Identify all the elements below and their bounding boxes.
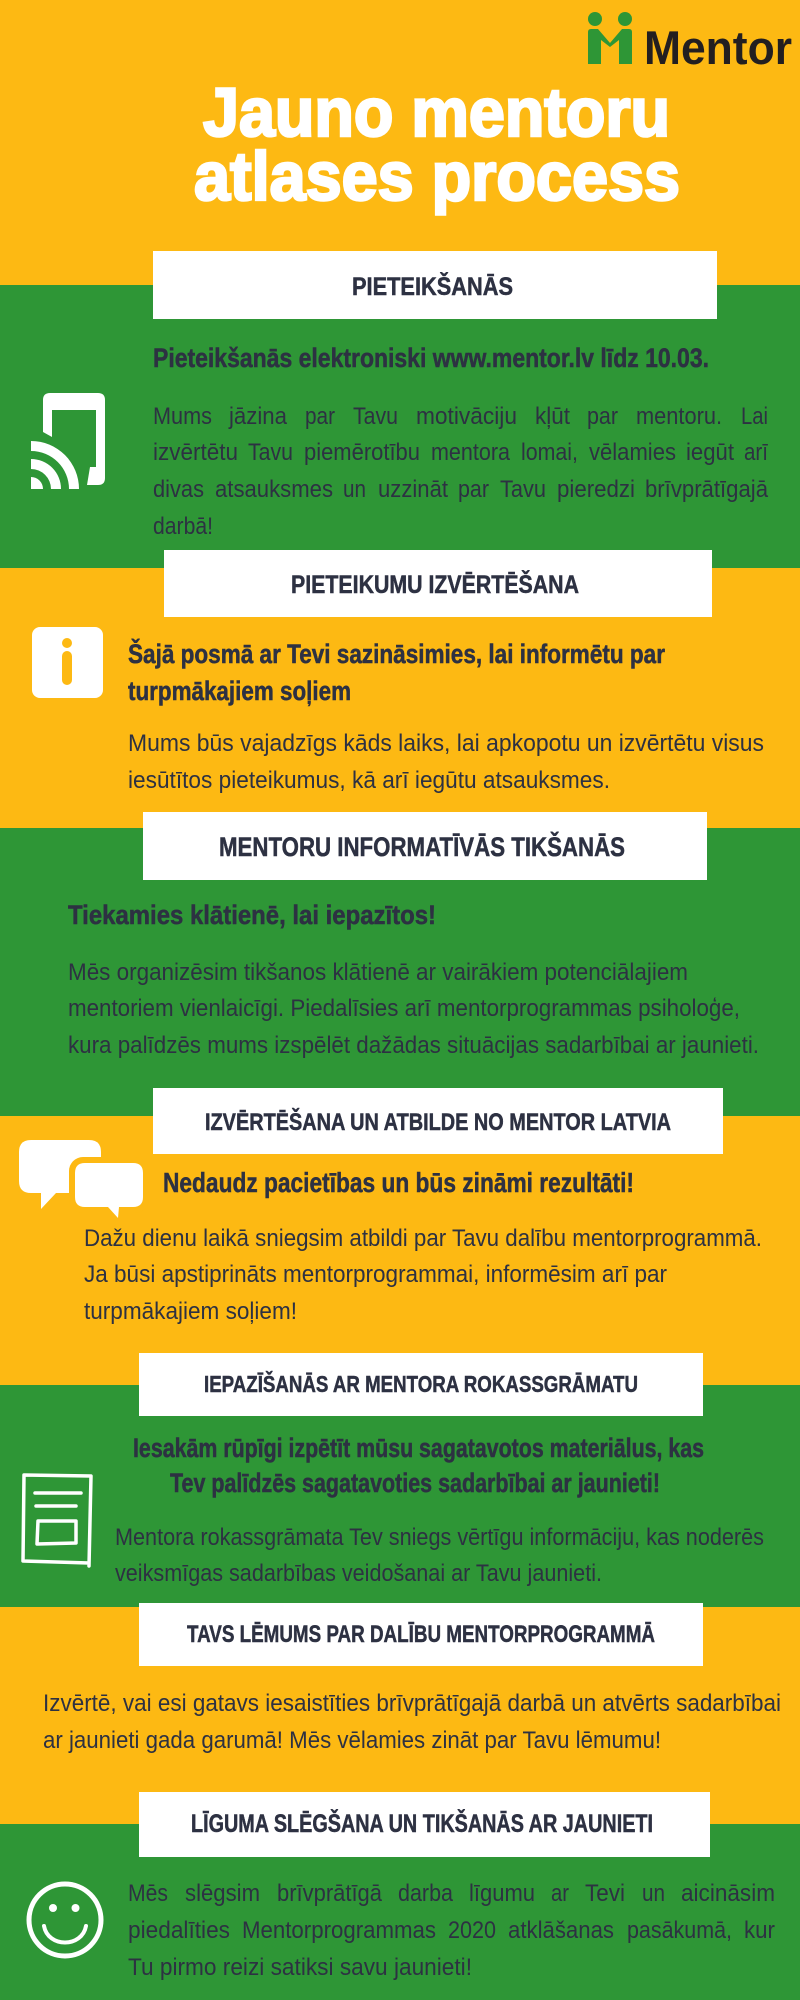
panel: izvērtēšana un atbilde — [19, 1088, 762, 1325]
subheading: Tev palīdzēs sagatavoties sadarbībai ar jaunieti! — [170, 1468, 660, 1498]
icon: chat bubbles — [19, 1140, 149, 1218]
subheading: Tiekamies klātienē, lai iepazītos! — [68, 900, 436, 930]
icon: smiley — [29, 1884, 101, 1956]
heading: mentoru informatīvās tikšanās: MENTORU INFORMATĪVĀS TIKŠANĀS — [219, 831, 625, 862]
body text: iesūtītos pieteikumus, kā arī iegūtu atsauksmes. — [128, 767, 610, 794]
logo: Mentor — [588, 12, 792, 74]
body text: uzzināt — [378, 476, 448, 503]
body text: Lai — [741, 403, 768, 430]
body text: par — [458, 476, 489, 503]
body text: pieredzi — [557, 476, 635, 503]
body text — [43, 1690, 781, 1754]
body text: Mums būs vajadzīgs kāds laiks, lai apkopotu un izvērtētu visus — [128, 730, 764, 757]
heading: pieteikumu izvērtēšana — [164, 550, 712, 617]
body text: Mēs organizēsim tikšanos klātienē ar vairākiem potenciālajiem — [68, 959, 688, 986]
body text — [128, 1880, 775, 1981]
body text: piemērotību — [304, 439, 420, 466]
body text: Tu pirmo reizi satiksi savu jaunieti! — [128, 1954, 472, 1981]
body text: atklāšanas — [508, 1917, 614, 1944]
heading: pieteikumu izvērtēšana: PIETEIKUMU IZVĒRTĒŠANA — [291, 569, 579, 599]
body text: jāzina — [228, 403, 287, 430]
heading: izvērtēšana un atbilde: IZVĒRTĒŠANA UN ATBILDE NO MENTOR LATVIA — [205, 1108, 671, 1136]
body text: un — [343, 476, 366, 503]
body text: kur — [744, 1917, 775, 1944]
subheading: Šajā posmā ar Tevi sazināsimies, lai informētu par — [128, 638, 665, 669]
body text: divas — [153, 476, 204, 503]
body text: izvērtētu — [153, 439, 238, 466]
body text: lomai, — [521, 439, 578, 466]
body text: brīvprātīgā — [277, 1880, 382, 1907]
body text — [153, 403, 768, 540]
body text: veiksmīgas sadarbības veidošanai ar Tavu jaunieti. — [115, 1560, 602, 1587]
heading: mentoru informatīvās tikšanās — [143, 812, 707, 880]
body text: ar jaunieti gada garumā! Mēs vēlamies zināt par Tavu lēmumu! — [43, 1727, 661, 1754]
body text: 2020 — [448, 1917, 496, 1944]
body text: kļūt — [535, 403, 570, 430]
body text: ar — [551, 1880, 569, 1907]
body text: Ja būsi apstiprināts mentorprogrammai, informēsim arī par — [84, 1261, 667, 1288]
body text: turpmākajiem soļiem! — [84, 1298, 297, 1325]
heading: tavs lēmums — [139, 1603, 703, 1666]
icon: info — [32, 627, 103, 698]
body text: un — [642, 1880, 665, 1907]
body text: Tavu — [353, 403, 398, 430]
heading: izvērtēšana un atbilde — [153, 1088, 723, 1154]
panel: pieteikšanās — [31, 251, 768, 540]
title: atlases process — [194, 138, 680, 215]
body text: Tevi — [585, 1880, 625, 1907]
heading: pieteikšanās: PIETEIKŠANĀS — [352, 271, 513, 301]
body text: iegūt — [686, 439, 734, 466]
heading: līguma slēgšana: LĪGUMA SLĒGŠANA UN TIKŠANĀS AR JAUNIETI — [191, 1808, 653, 1838]
subheading: Nedaudz pacietības un būs zināmi rezultāti! — [163, 1167, 634, 1198]
panel: pieteikumu izvērtēšana — [32, 550, 764, 794]
icon: document — [23, 1475, 91, 1566]
body text: mentoriem vienlaicīgi. Piedalīsies arī mentorprogrammas psiholoģe, — [68, 995, 740, 1022]
body text: piedalīties — [128, 1917, 230, 1944]
body text: Mēs — [128, 1880, 168, 1907]
body text: darba — [398, 1880, 453, 1907]
heading: iepazīšanās ar rokasgrāmatu: IEPAZĪŠANĀS AR MENTORA ROKASSGRĀMATU — [204, 1370, 638, 1397]
title — [194, 74, 680, 215]
subheading — [133, 1433, 704, 1498]
panel: tavs lēmums — [43, 1603, 781, 1754]
body text: Mentorprogrammas — [242, 1917, 436, 1944]
body text: līgumu — [469, 1880, 535, 1907]
body text: motivāciju — [416, 403, 517, 430]
icon: phone cast — [31, 393, 105, 489]
body text: pasākumā, — [627, 1917, 732, 1944]
body text: par — [587, 403, 618, 430]
body text: par — [305, 403, 335, 430]
body text — [84, 1225, 762, 1325]
body text — [68, 959, 759, 1059]
body text: arī — [744, 439, 768, 466]
body text: aicināsim — [681, 1880, 775, 1907]
heading: pieteikšanās — [153, 251, 717, 319]
heading: iepazīšanās ar rokasgrāmatu — [139, 1353, 703, 1416]
logo: Mentor: Mentor — [644, 21, 792, 74]
heading: tavs lēmums: TAVS LĒMUMS PAR DALĪBU MENTORPROGRAMMĀ — [187, 1621, 655, 1648]
heading: līguma slēgšana — [139, 1792, 710, 1857]
body text — [128, 730, 764, 794]
body text: darbā! — [153, 513, 213, 540]
body text: atsauksmes — [215, 476, 333, 503]
body text: Tavu — [248, 439, 293, 466]
body text: mentora — [431, 439, 510, 466]
panel: mentoru informatīvās tikšanās — [68, 812, 759, 1059]
body text — [115, 1524, 764, 1587]
body text: slēgsim — [185, 1880, 260, 1907]
body text: brīvprātīgajā — [645, 476, 768, 503]
body text: Mums — [153, 403, 212, 430]
title: Jauno mentoru — [203, 74, 670, 151]
subheading: Pieteikšanās elektroniski www.mentor.lv līdz 10.03. — [153, 343, 709, 373]
subheading: turpmākajiem soļiem — [128, 676, 351, 706]
body text: Tavu — [500, 476, 546, 503]
panel: iepazīšanās ar rokasgrāmatu — [23, 1353, 764, 1587]
subheading — [128, 638, 665, 706]
panel: līguma slēgšana — [29, 1792, 775, 1981]
body text: vēlamies — [589, 439, 676, 466]
body text: mentoru. — [636, 403, 722, 430]
